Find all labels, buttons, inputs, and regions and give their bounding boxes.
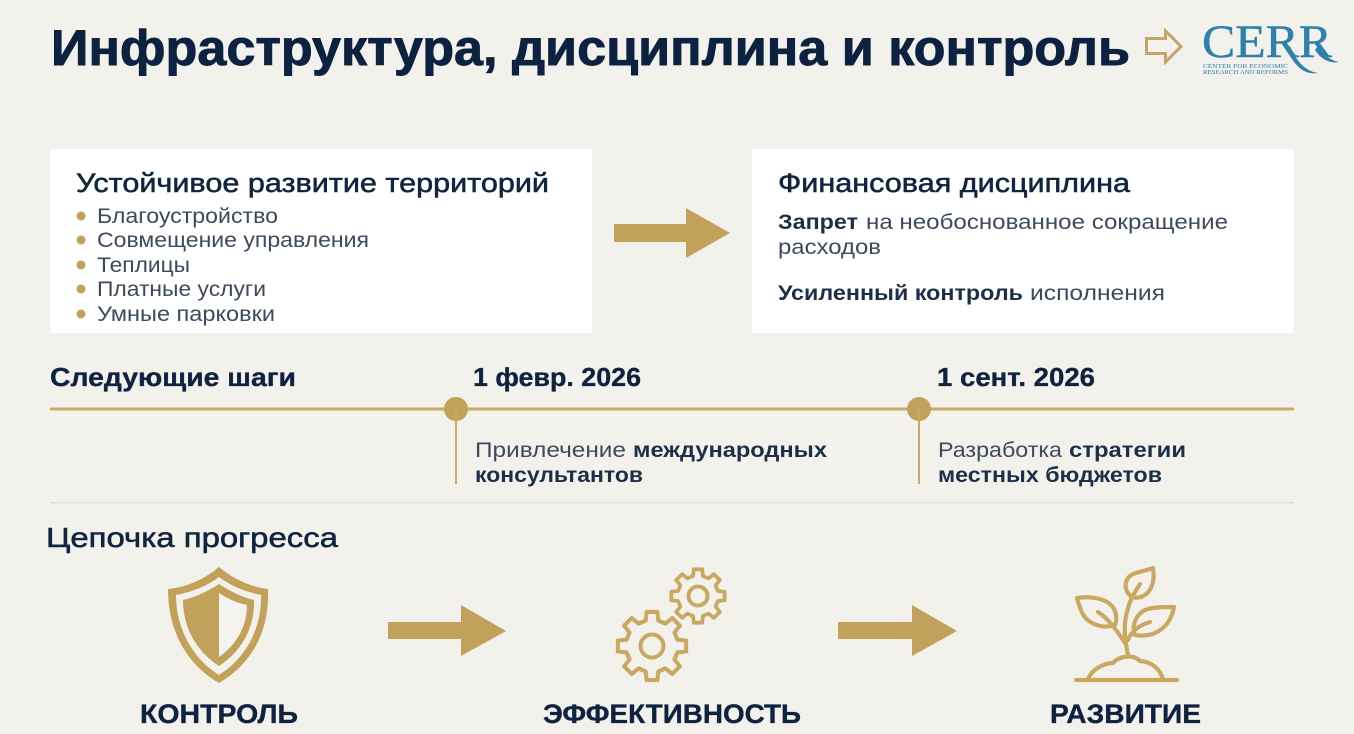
ban text: на необоснованное сокращение [866,211,1228,234]
icon: outline arrow to logo [1146,31,1181,62]
arrow: efficiency to development [838,605,957,656]
heading: chain of progress: Цепочка прогресса [46,522,338,553]
bullet list: Платные услуги [97,278,266,301]
bullet list [76,205,369,326]
milestone: 1 Feb 2026: 1 февр. 2026 [473,362,641,392]
control text: Усиленный контроль [778,282,1023,305]
label: development: РАЗВИТИЕ [1050,699,1201,729]
milestone: 1 Feb 2026: консультантов [475,464,643,487]
arrow between panels [614,208,730,258]
ban text: расходов [778,236,881,259]
timeline heading: Следующие шаги [50,362,296,392]
bullet list: Умные парковки [97,303,275,326]
milestone: 1 Feb 2026: Привлечение [475,439,626,462]
logo: CERR: RESEARCH AND REFORMS [1203,69,1288,76]
panel: sustainable development [50,149,592,333]
panel heading: Устойчивое развитие территорий [76,168,549,198]
ban text: Запрет [778,211,858,234]
panel: financial discipline [752,149,1294,333]
milestone: 1 Feb 2026: международных [633,439,827,462]
bullet list: Совмещение управления [97,229,369,252]
icon: sprout [1076,568,1177,680]
icon: gears [618,569,725,680]
label: efficiency: ЭФФЕКТИВНОСТЬ [543,699,801,729]
ban text [778,211,1228,259]
control text [778,282,1165,305]
logo: CERR: CERR [1202,16,1333,68]
milestone: 1 Sep 2026: стратегии [1069,439,1186,462]
control text: исполнения [1030,282,1165,305]
timeline: next steps [50,362,1294,487]
bullet list: Благоустройство [97,205,278,228]
label: control: КОНТРОЛЬ [140,699,298,729]
milestone: 1 Sep 2026: Разработка [938,439,1062,462]
milestone: 1 Feb 2026 [444,362,827,487]
arrow: control to efficiency [388,605,506,656]
milestone: 1 Sep 2026 [907,362,1186,487]
bullet list: Теплицы [97,254,190,277]
title: Инфраструктура, дисциплина и контроль [51,20,1130,76]
milestone: 1 Sep 2026: 1 сент. 2026 [937,362,1095,392]
icon: shield [168,567,268,683]
milestone: 1 Sep 2026: местных бюджетов [938,464,1162,487]
logo: CERR: CENTER FOR ECONOMIC [1203,63,1289,70]
panel heading: Финансовая дисциплина [778,168,1131,198]
